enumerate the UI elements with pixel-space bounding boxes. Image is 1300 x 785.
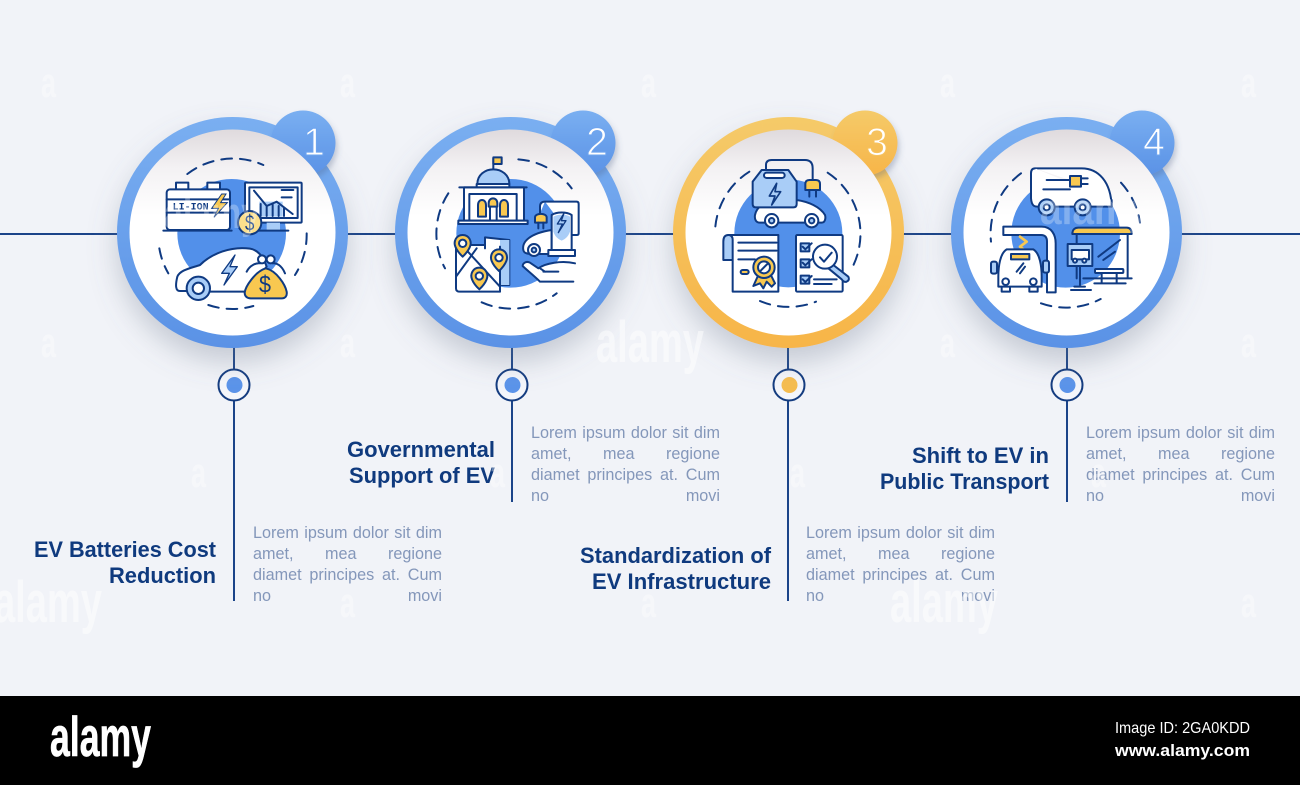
stock watermarks: a — [490, 449, 505, 496]
number badge 2 — [550, 110, 616, 176]
body text 2: Lorem ipsum dolor sit dim — [531, 424, 720, 442]
icon: battery, monitor, coin, car, purse: $ — [259, 272, 271, 299]
ring 2 — [395, 117, 626, 348]
body text 1: no movi — [253, 587, 442, 605]
body text 1: diamet principes at. Cum — [253, 566, 442, 584]
panel: step 3 standardization — [580, 110, 995, 607]
body text 3: Lorem ipsum dolor sit dim — [806, 524, 995, 542]
stock watermarks: a — [940, 59, 955, 106]
body text 2: amet, mea regione — [531, 445, 720, 463]
body text 4: no movi — [1086, 487, 1275, 505]
body text 3: diamet principes at. Cum — [806, 566, 995, 584]
stock watermarks — [0, 59, 1256, 635]
title 3: Standardization of — [580, 543, 772, 568]
title 1: EV Batteries Cost — [34, 537, 217, 562]
title 4 — [880, 443, 1050, 494]
title 4: Shift to EV in — [912, 443, 1049, 468]
number badge 3 — [832, 110, 898, 176]
body text 4: diamet principes at. Cum — [1086, 466, 1275, 484]
title 3: EV Infrastructure — [592, 569, 771, 594]
body text 2 — [531, 423, 720, 507]
stock watermarks: a — [191, 449, 206, 496]
ring 3 — [673, 117, 904, 348]
body text 2: no movi — [531, 487, 720, 505]
title 2: Support of EV — [349, 463, 495, 488]
title 2: Governmental — [347, 437, 495, 462]
title 4: Public Transport — [880, 469, 1050, 494]
body text 1: amet, mea regione — [253, 545, 442, 563]
ring 1 — [117, 117, 348, 348]
number badge 3: 3 — [866, 121, 888, 164]
body text 1: Lorem ipsum dolor sit dim — [253, 524, 442, 542]
stem and node 2 — [496, 340, 528, 502]
number badge 4: 4 — [1143, 121, 1165, 164]
body text 3: no movi — [806, 587, 995, 605]
stock watermarks: alamy — [890, 570, 998, 635]
stock watermarks: a — [1091, 449, 1106, 496]
footer url: www.alamy.com — [1114, 741, 1250, 760]
icon: battery car, certificate, checklist — [715, 160, 860, 307]
footer logo: alamy — [50, 705, 151, 768]
title 3 — [580, 543, 772, 594]
stock watermarks: a — [340, 59, 355, 106]
stock watermarks: a — [790, 449, 805, 496]
body text 1 — [253, 523, 442, 607]
icon: battery, monitor, coin, car, purse: $ — [245, 211, 254, 236]
stock watermarks: a — [1241, 319, 1256, 366]
body text 3: amet, mea regione — [806, 545, 995, 563]
stem and node 4 — [1052, 340, 1082, 502]
stock watermarks: alamy — [1040, 185, 1150, 234]
body text 3 — [806, 523, 995, 607]
panel: step 1 batteries cost — [34, 110, 442, 607]
icon: government building, map, charger, hand — [436, 157, 579, 309]
body text 4: Lorem ipsum dolor sit dim — [1086, 424, 1275, 442]
inner disc 2 — [408, 130, 614, 336]
icon: battery, monitor, coin, car, purse — [159, 159, 307, 309]
horizontal timeline — [0, 233, 1300, 235]
inner disc 3 — [686, 130, 892, 336]
footer bar — [0, 696, 1300, 785]
ring 4 — [951, 117, 1182, 348]
body text 2: diamet principes at. Cum — [531, 466, 720, 484]
number badge 2: 2 — [586, 121, 608, 164]
stock watermarks: a — [940, 319, 955, 366]
image id: Image ID: 2GA0KDD — [1115, 720, 1250, 737]
stock watermarks: alamy — [596, 310, 704, 375]
title 1: Reduction — [109, 563, 216, 588]
title 2 — [347, 437, 495, 488]
panel: step 2 governmental support — [347, 110, 720, 507]
number badge 4 — [1110, 110, 1174, 176]
stock watermarks: alamy — [164, 189, 260, 238]
stock watermarks: a — [340, 579, 355, 626]
stem and node 3 — [774, 340, 804, 601]
icon: electric train, charging canopy, bus, shelter — [991, 168, 1140, 308]
number badge 1: 1 — [303, 121, 325, 164]
icon: battery, monitor, coin, car, purse: LI-ION — [173, 201, 209, 212]
stock watermarks: a — [1241, 59, 1256, 106]
number badge 1 — [270, 110, 336, 176]
stock watermarks: a — [1241, 579, 1256, 626]
inner disc 1 — [130, 130, 336, 336]
stock watermarks: a — [641, 59, 656, 106]
stock watermarks: a — [340, 319, 355, 366]
panel: step 4 public transport — [880, 110, 1275, 507]
inner disc 4 — [964, 130, 1170, 336]
body text 4 — [1086, 423, 1275, 507]
stock watermarks: a — [641, 579, 656, 626]
body text 4: amet, mea regione — [1086, 445, 1275, 463]
stem and node 1 — [218, 340, 250, 601]
title 1 — [34, 537, 217, 588]
stock watermarks: a — [41, 59, 56, 106]
stock watermarks: a — [41, 319, 56, 366]
